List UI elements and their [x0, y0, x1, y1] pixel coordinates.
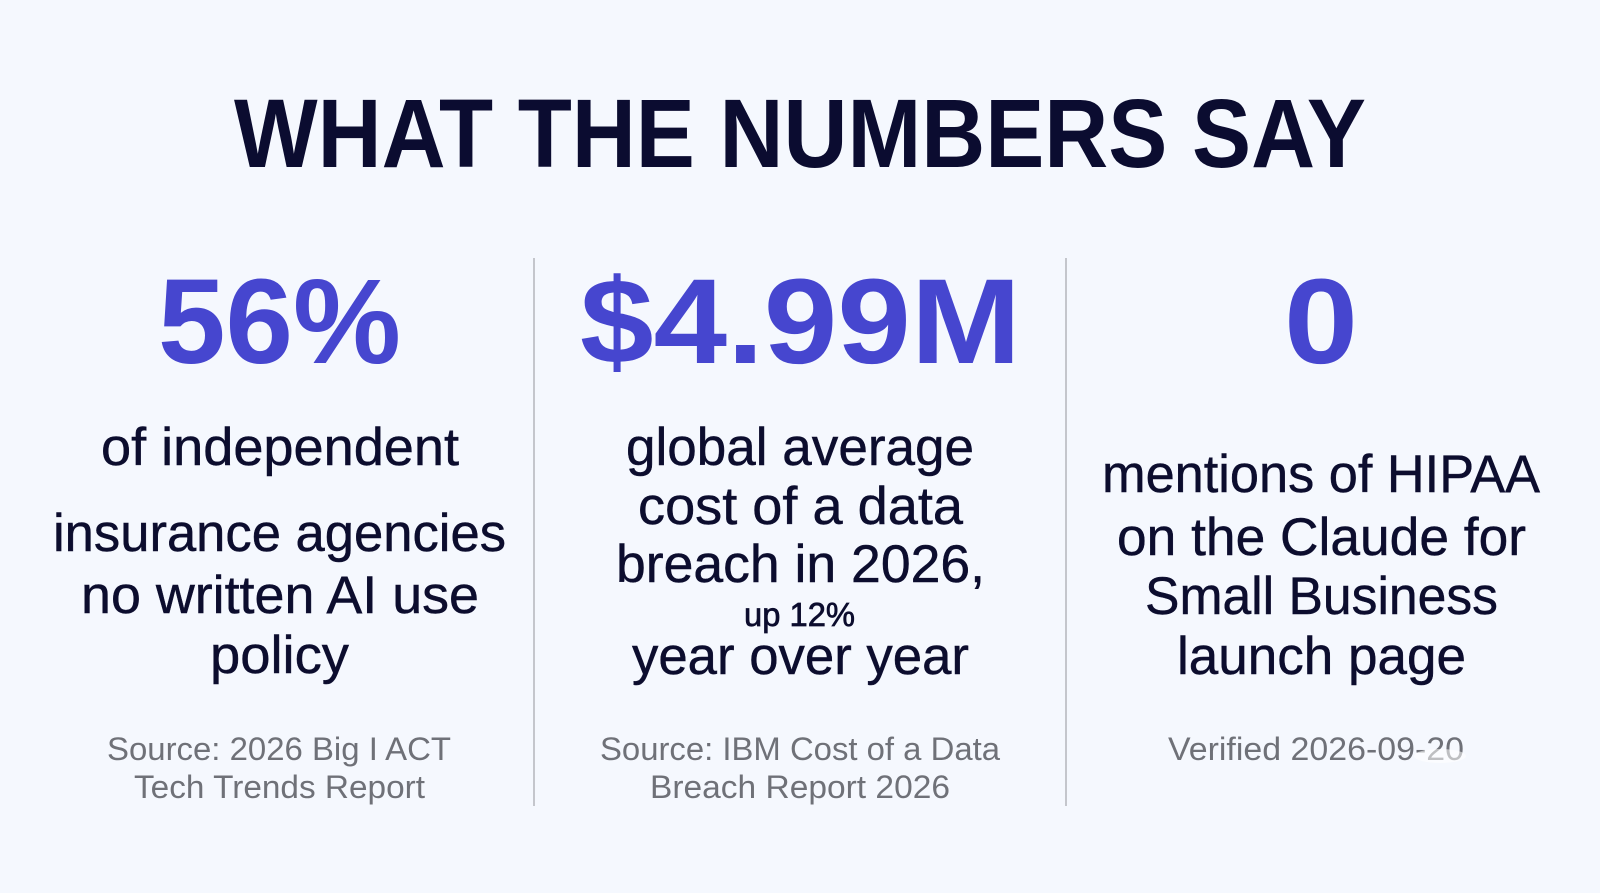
big number: 0: 0 — [1284, 253, 1358, 389]
panel: 56 percent stat — [53, 253, 506, 805]
description: independent agencies: insurance agencies — [53, 504, 506, 563]
description: HIPAA mentions: mentions of HIPAA — [1102, 445, 1541, 504]
description: breach cost: up 12% — [744, 596, 855, 633]
source: Big I ACT: Tech Trends Report — [134, 769, 425, 805]
source: IBM: Breach Report 2026 — [650, 769, 950, 805]
source: Big I ACT — [107, 731, 451, 805]
description: independent agencies: of independent — [101, 418, 459, 477]
panel: HIPAA mentions stat — [1102, 253, 1541, 767]
description: HIPAA mentions: launch page — [1177, 627, 1466, 686]
description: breach cost: cost of a data — [638, 477, 964, 536]
description: HIPAA mentions: on the Claude for — [1117, 508, 1526, 567]
description: breach cost: global average — [626, 418, 974, 477]
description: independent agencies: policy — [210, 626, 349, 685]
description: independent agencies — [53, 418, 506, 685]
description: breach cost: year over year — [632, 627, 969, 686]
description: breach cost: breach in 2026, — [616, 535, 985, 594]
description: independent agencies: no written AI use — [81, 566, 479, 625]
source: IBM: Source: IBM Cost of a Data — [600, 731, 1000, 767]
big number: $4.99M: $4.99M — [580, 253, 1021, 389]
description: HIPAA mentions: Small Business — [1145, 567, 1498, 626]
description: breach cost — [616, 418, 985, 686]
title: WHAT THE NUMBERS SAY — [234, 79, 1366, 188]
panel: breach cost stat — [580, 253, 1021, 805]
verified date: Verified 2026-09-20 — [1168, 731, 1464, 767]
source: IBM — [600, 731, 1000, 805]
description: HIPAA mentions — [1102, 445, 1541, 686]
source: Big I ACT: Source: 2026 Big I ACT — [107, 731, 451, 767]
big number: 56%: 56% — [158, 253, 401, 389]
